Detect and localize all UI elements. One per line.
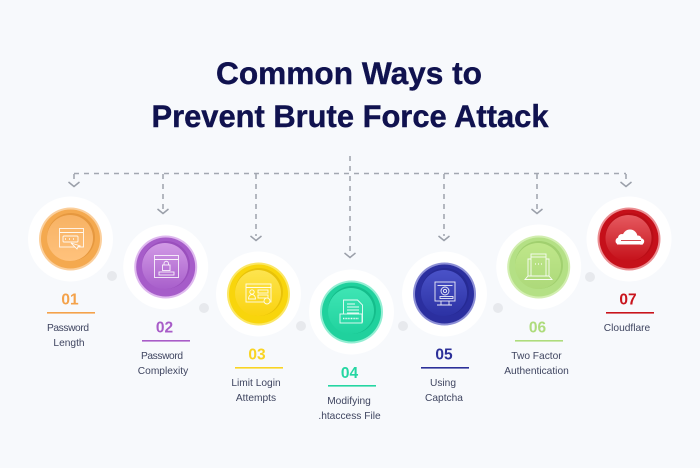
label: Modifying .htaccess File: .htaccess File bbox=[318, 411, 381, 422]
label: Password Length: Password bbox=[47, 323, 89, 334]
icon: lock window bbox=[154, 256, 178, 278]
number 02: 02 bbox=[156, 320, 173, 336]
number 06: 06 bbox=[529, 320, 546, 336]
step 02: password complexity bbox=[123, 224, 208, 377]
number 05: 05 bbox=[435, 346, 453, 364]
connector dots bbox=[107, 271, 595, 331]
label: Using Captcha: Using bbox=[430, 378, 456, 389]
step 07: cloudflare bbox=[586, 196, 672, 334]
label: Modifying .htaccess File: Modifying bbox=[327, 396, 371, 407]
icon: captcha monitor bbox=[435, 282, 455, 305]
label: Using Captcha: Captcha bbox=[425, 393, 463, 404]
label: Password Complexity bbox=[138, 351, 189, 377]
label: Limit Login Attempts: Attempts bbox=[236, 393, 276, 404]
label: Limit Login Attempts: Limit Login bbox=[231, 378, 281, 389]
number 03: 03 bbox=[248, 346, 266, 364]
icon: password window bbox=[60, 228, 84, 249]
icon: laptop and phone bbox=[525, 254, 552, 280]
icon: document bbox=[340, 300, 362, 323]
label: Two Factor Authentication bbox=[504, 351, 569, 377]
label: Modifying .htaccess File bbox=[318, 396, 381, 422]
label: Two Factor Authentication: Authentication bbox=[504, 366, 569, 377]
label: Password Complexity: Password bbox=[141, 351, 183, 362]
title: Prevent Brute Force Attack bbox=[152, 98, 549, 134]
number 01: 01 bbox=[61, 292, 79, 308]
label: Cloudflare: Cloudflare bbox=[604, 323, 651, 334]
label: Two Factor Authentication: Two Factor bbox=[511, 351, 562, 362]
number 04: 04 bbox=[341, 365, 358, 382]
dashed connector tree with arrows bbox=[68, 156, 632, 258]
label: Using Captcha bbox=[425, 378, 463, 404]
title: Common Ways to bbox=[216, 55, 482, 91]
label: Limit Login Attempts bbox=[231, 378, 281, 404]
step 04: modifying htaccess file bbox=[309, 270, 394, 422]
step 03: limit login attempts bbox=[216, 252, 301, 404]
step 01: password length bbox=[28, 196, 113, 349]
number 07: 07 bbox=[619, 292, 637, 308]
label: Password Length bbox=[47, 323, 89, 349]
step 06: two factor authentication bbox=[496, 224, 581, 377]
icon: cloud bbox=[616, 230, 644, 245]
label: Password Complexity: Complexity bbox=[138, 366, 189, 377]
step 05: using captcha bbox=[402, 252, 487, 404]
label: Password Length: Length bbox=[53, 338, 85, 349]
icon: login window bbox=[246, 284, 271, 304]
title bbox=[152, 55, 549, 134]
